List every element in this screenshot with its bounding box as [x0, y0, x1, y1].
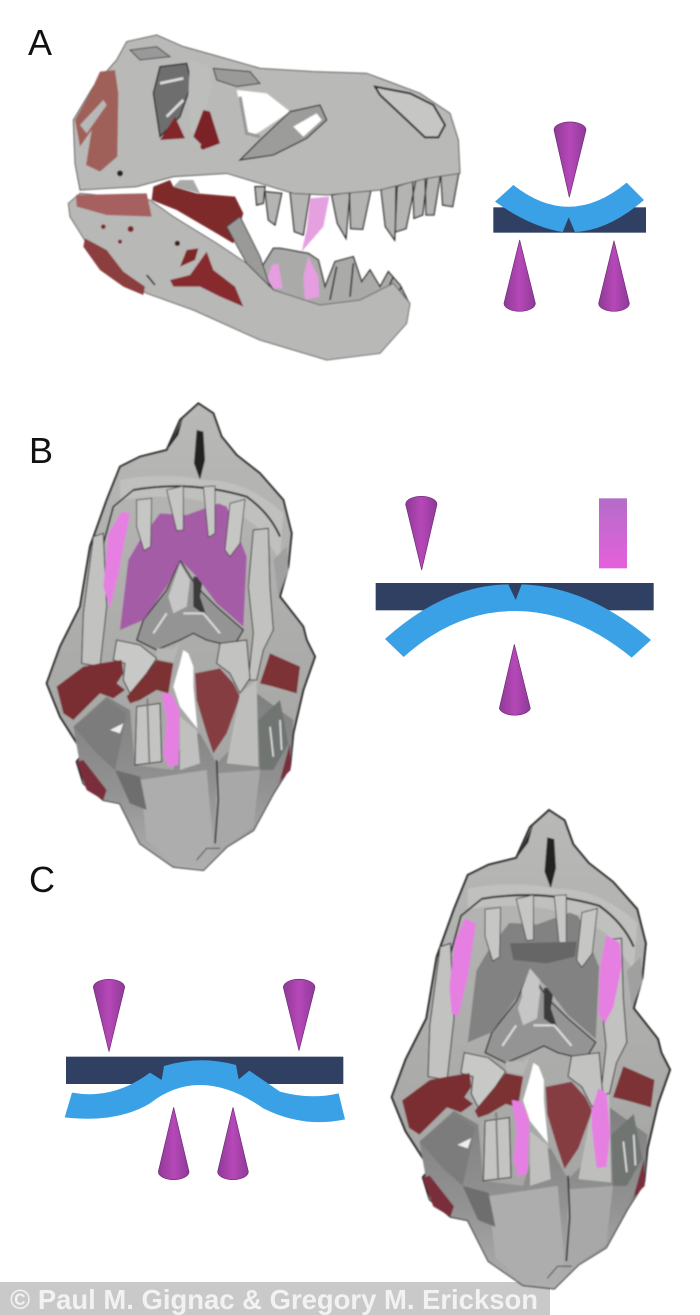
blue band	[65, 1060, 345, 1122]
nasal opening	[375, 87, 445, 137]
lower cone	[499, 644, 530, 715]
top cone	[554, 122, 586, 197]
palate	[120, 503, 247, 630]
jaw muscle patches	[76, 193, 152, 217]
skull C: ventral view with pink teeth	[392, 810, 670, 1288]
pink tooth, upper	[302, 197, 329, 252]
dark bar	[376, 583, 654, 610]
label: B: B	[29, 430, 53, 471]
pink lower teeth	[267, 263, 283, 288]
bar	[188, 60, 212, 133]
top right cone	[283, 979, 315, 1051]
diagram A: bend with cones	[493, 122, 646, 311]
pink block	[599, 498, 627, 568]
skull A: side view	[68, 35, 460, 360]
lower left cone	[158, 1107, 189, 1180]
skull B: ventral view with purple palate	[47, 403, 315, 870]
lower teeth	[260, 248, 408, 317]
eye sockets	[153, 63, 192, 137]
pink lower tooth	[162, 693, 179, 767]
blue curved band	[385, 584, 651, 658]
cranium	[73, 35, 460, 195]
lower jaw	[68, 193, 410, 360]
dark bar	[66, 1057, 343, 1084]
lower right cone	[218, 1107, 248, 1180]
top cone	[406, 496, 437, 570]
antorbital opening	[237, 90, 290, 137]
diagram B: bend with cones and block	[376, 496, 654, 715]
blue curved band	[495, 183, 644, 232]
pink teeth	[449, 918, 476, 1017]
label: C: C	[29, 859, 55, 900]
lower right cone	[599, 241, 629, 311]
lower left cone	[504, 240, 535, 311]
red muscles upper	[75, 70, 118, 172]
credit bar: © Paul M. Gignac & Gregory M. Erickson	[10, 1284, 538, 1315]
dark bar	[493, 207, 646, 233]
pink upper tooth	[103, 512, 130, 608]
top left cone	[93, 979, 125, 1052]
interior mouth muscle	[152, 180, 243, 243]
diagram C: double bend with cones	[65, 979, 345, 1180]
label: A: A	[28, 22, 52, 63]
